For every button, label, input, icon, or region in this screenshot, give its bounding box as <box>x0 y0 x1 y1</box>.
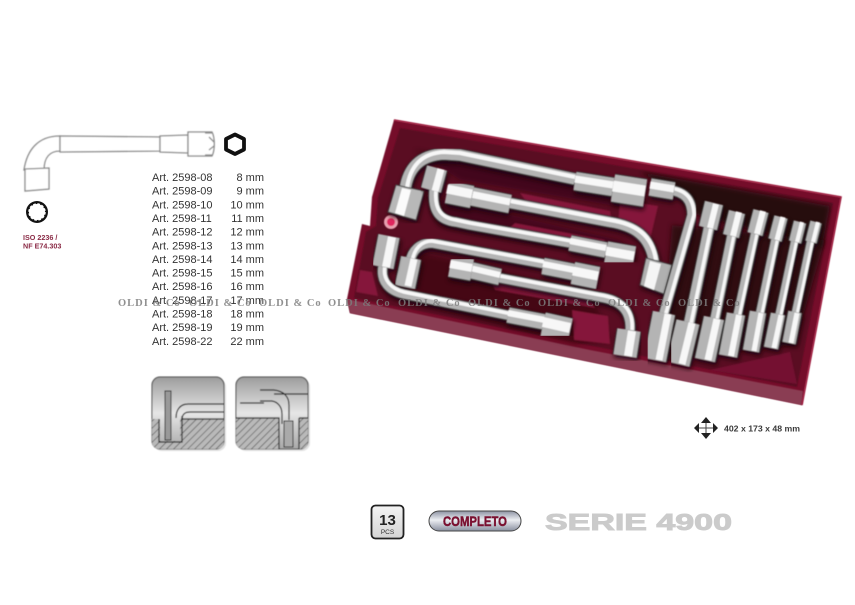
lighter foam pockets <box>356 193 797 384</box>
watermark: OLDI & Co <box>608 298 671 309</box>
watermark: OLDI & Co <box>259 298 322 309</box>
icon: hexagon socket profile <box>226 134 244 154</box>
dark recess shadows <box>390 150 825 360</box>
watermark <box>118 298 741 309</box>
watermark: OLDI & Co <box>398 298 461 309</box>
product photo: tool tray <box>347 120 841 405</box>
badge: 13 pieces: 13 <box>379 512 396 529</box>
article size table: Art. 2598-18 <box>152 308 213 320</box>
badge: completo: COMPLETO <box>443 513 507 529</box>
article size table: 12 mm <box>230 227 264 239</box>
shadowed upper shelf <box>640 172 830 248</box>
panel: usage diagram through bolt <box>236 377 310 451</box>
watermark: OLDI & Co <box>118 298 181 309</box>
article size table: 15 mm <box>230 268 264 280</box>
article size table: Art. 2598-10 <box>152 199 213 211</box>
article size table: Art. 2598-08 <box>152 172 213 184</box>
badge: completo <box>429 511 521 531</box>
watermark: OLDI & Co <box>189 298 252 309</box>
wrench 5 <box>450 264 632 356</box>
article size table: Art. 2598-09 <box>152 186 213 198</box>
article size table: Art. 2598-16 <box>152 281 213 293</box>
watermark: OLDI & Co <box>468 298 531 309</box>
article size table: Art. 2598-14 <box>152 254 213 266</box>
article size table: 14 mm <box>230 254 264 266</box>
badge: 13 pieces <box>372 506 404 538</box>
article size table: 16 mm <box>230 281 264 293</box>
article size table: Art. 2598-19 <box>152 322 213 334</box>
article size table <box>152 172 264 348</box>
badge: 13 pieces: PCS <box>381 529 395 536</box>
tray rim highlight <box>394 120 841 405</box>
wrench 4 <box>405 241 598 287</box>
article size table: 18 mm <box>230 308 264 320</box>
series name: SERIE 4900 <box>545 509 732 535</box>
article size table: Art. 2598-15 <box>152 268 213 280</box>
badge <box>384 215 398 229</box>
standard label: ISO 2236 / <box>23 233 57 242</box>
article size table: Art. 2598-12 <box>152 227 213 239</box>
article size table: 10 mm <box>230 199 264 211</box>
watermark: OLDI & Co <box>678 298 741 309</box>
icon: twelve-point socket profile <box>26 201 48 223</box>
tray floor <box>354 128 833 387</box>
icon: dimensions arrows <box>694 417 718 439</box>
article size table: Art. 2598-11 <box>152 213 212 225</box>
watermark: OLDI & Co <box>328 298 391 309</box>
wrench line drawing <box>24 132 214 191</box>
watermark: OLDI & Co <box>538 298 601 309</box>
article size table: 11 mm <box>231 213 264 225</box>
article size table: 8 mm <box>236 172 264 184</box>
tray body <box>347 120 841 405</box>
panel: usage diagram recessed bolt <box>152 377 226 451</box>
article size table: 9 mm <box>236 186 264 198</box>
article size table: 17 mm <box>230 295 264 307</box>
article size table: 13 mm <box>230 240 264 252</box>
dimensions label: 402 x 173 x 48 mm <box>724 424 800 434</box>
article size table: Art. 2598-22 <box>152 336 213 348</box>
article size table: 22 mm <box>230 336 264 348</box>
wrench 2 <box>431 168 634 258</box>
article size table: Art. 2598-13 <box>152 240 213 252</box>
article size table: Art. 2598-17 <box>152 295 213 307</box>
wrench 6 <box>382 236 570 331</box>
article size table: 19 mm <box>230 322 264 334</box>
tray front lip <box>347 299 803 405</box>
long L wrench <box>650 185 694 360</box>
straight double sockets <box>678 203 818 364</box>
wrench 3 <box>447 189 672 294</box>
wrench 1 <box>388 152 645 220</box>
standard label: NF E74.303 <box>23 242 61 250</box>
